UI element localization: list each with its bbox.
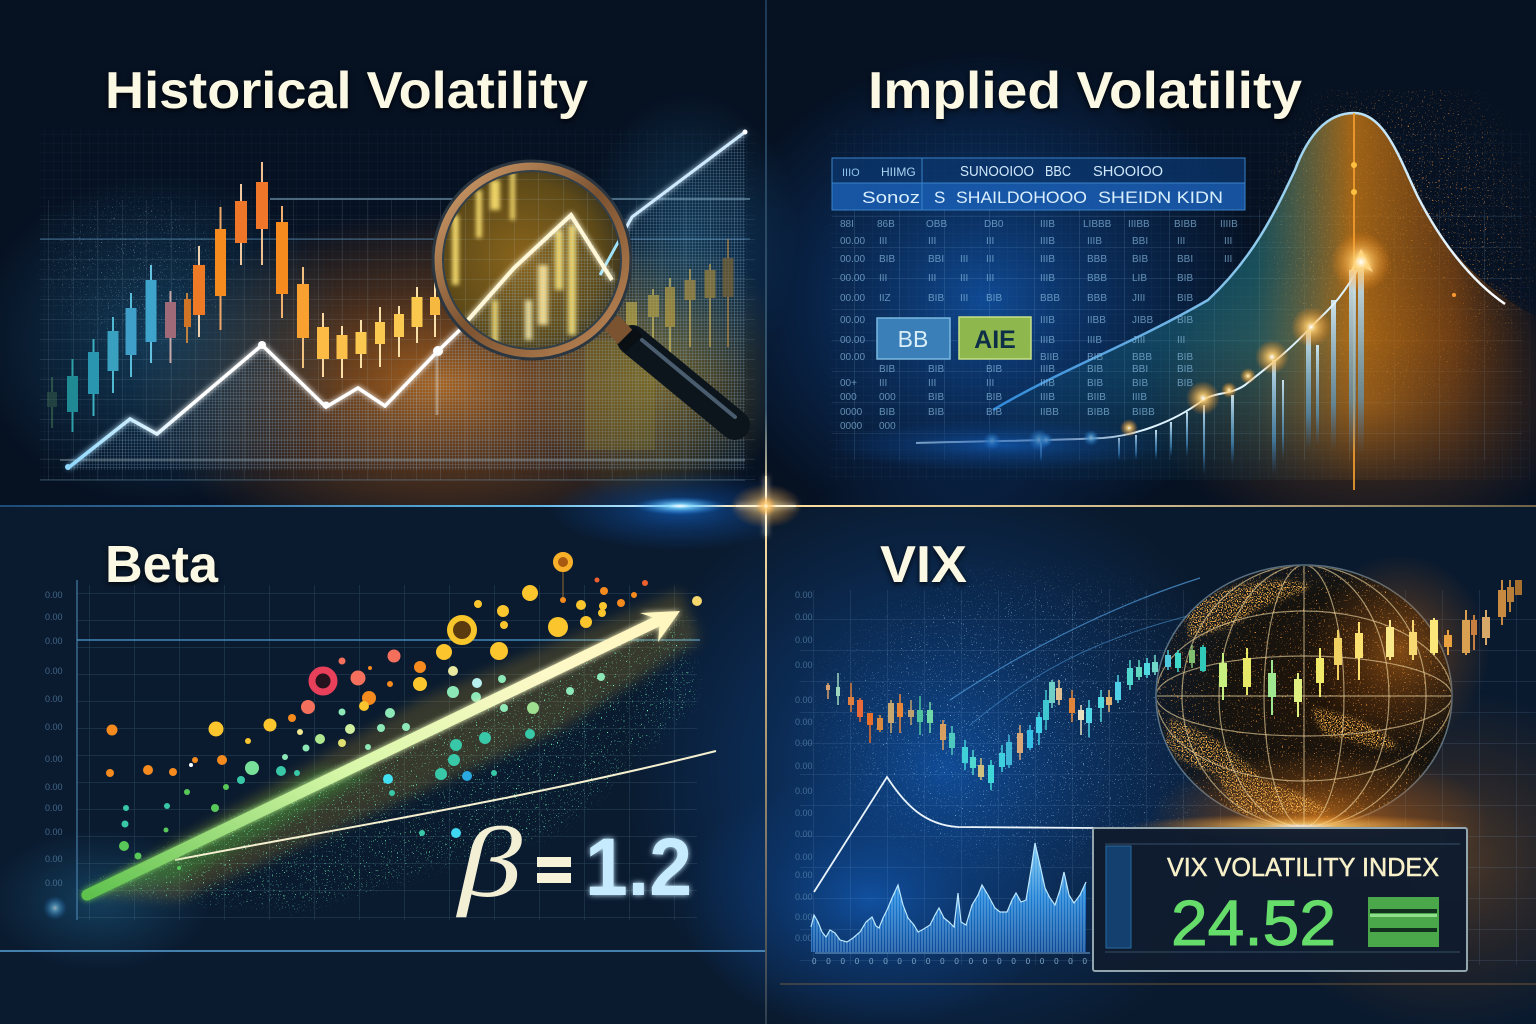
table rows: BBB xyxy=(1087,273,1107,284)
table rows: IIBB xyxy=(1040,407,1059,418)
axis labels: 0.00 xyxy=(795,829,813,839)
table rows: IIZ xyxy=(879,293,891,304)
candlestick chart xyxy=(826,580,1522,790)
table rows: 00.00 xyxy=(840,236,865,247)
table rows: 000 xyxy=(840,392,857,403)
table rows: IIIB xyxy=(1040,335,1055,346)
table rows: LIB xyxy=(1132,273,1147,284)
table rows: 0000 xyxy=(840,421,863,432)
axis labels: 0.00 xyxy=(795,635,813,645)
axis labels: 0.00 xyxy=(45,694,63,704)
table rows: IIIB xyxy=(1040,236,1055,247)
axis labels: 0.00 xyxy=(795,852,813,862)
axis labels: 0.00 xyxy=(795,717,813,727)
panel: historical volatility xyxy=(30,62,755,480)
axis labels: 0.00 xyxy=(45,722,63,732)
options table: SHAILDOHOOO xyxy=(956,188,1087,207)
axis labels: 0.00 xyxy=(795,786,813,796)
table rows: III xyxy=(928,378,936,389)
axis labels: 0.00 xyxy=(795,870,813,880)
options table xyxy=(832,158,1245,432)
table rows: 00.00 xyxy=(840,254,865,265)
chart grid xyxy=(30,130,755,480)
glow under globe xyxy=(1130,814,1470,838)
table rows: BIB xyxy=(879,254,895,265)
table rows: BIB xyxy=(1177,315,1193,326)
chart grid xyxy=(830,90,1536,500)
axis labels: 0.00 xyxy=(45,590,63,600)
table rows: BIB xyxy=(986,293,1002,304)
scatter particles xyxy=(70,554,710,940)
table rows: BIBB xyxy=(1174,219,1197,230)
table rows: BIIB xyxy=(1087,392,1106,403)
table rows: 00.00 xyxy=(840,315,865,326)
area under price line xyxy=(68,132,745,470)
title: implied volatility: Implied Volatility xyxy=(868,62,1302,120)
options table: HIIMG xyxy=(881,165,916,179)
table rows: BIB xyxy=(1132,378,1148,389)
table rows: BBI xyxy=(1132,364,1148,375)
button: green: AIE xyxy=(974,326,1016,354)
scatter plot grid and axis xyxy=(77,580,700,920)
options table: IIIO xyxy=(842,167,860,179)
table rows: IIIB xyxy=(1040,378,1055,389)
table rows: BBB xyxy=(1132,352,1152,363)
table rows: BIB xyxy=(928,392,944,403)
vix readout panel xyxy=(1093,828,1467,971)
table rows: BIIB xyxy=(1040,352,1059,363)
table rows: III xyxy=(1177,335,1185,346)
table rows: 00.00 xyxy=(840,293,865,304)
title: beta: Beta xyxy=(105,536,219,594)
axis labels: 0.00 xyxy=(795,612,813,622)
axis labels: 0.00 xyxy=(795,892,813,902)
table rows: BBB xyxy=(1087,254,1107,265)
table rows: III xyxy=(879,236,887,247)
table rows: III xyxy=(879,273,887,284)
table rows: BIB xyxy=(1177,364,1193,375)
orange light streaks xyxy=(780,935,1536,984)
table rows: IIIB xyxy=(1040,392,1055,403)
table rows: 00+ xyxy=(840,378,857,389)
panel: implied volatility xyxy=(830,62,1536,500)
axis labels: 0.00 xyxy=(795,761,813,771)
table rows: III xyxy=(986,273,994,284)
formula: beta equals 1.2: 1.2 xyxy=(585,822,692,913)
table rows xyxy=(840,219,1238,432)
table rows: BIB xyxy=(986,392,1002,403)
readout status icon xyxy=(1368,897,1439,947)
panel: vix xyxy=(780,536,1536,984)
axis labels: 0.00 xyxy=(795,933,813,943)
axis labels: 0.00 xyxy=(45,666,63,676)
readout label: VIX VOLATILITY INDEX xyxy=(1167,852,1439,882)
axis labels xyxy=(795,590,813,943)
axis labels: 0.00 xyxy=(45,754,63,764)
table rows: LIBBB xyxy=(1083,219,1112,230)
table rows: IIIB xyxy=(1040,273,1055,284)
options table: S xyxy=(934,188,945,207)
table rows: 000 xyxy=(879,421,896,432)
lens: magnified chart xyxy=(444,172,620,348)
table rows: BIB xyxy=(1177,352,1193,363)
table rows: BBI xyxy=(1132,236,1148,247)
table rows: III xyxy=(960,254,968,265)
table rows: JIII xyxy=(1132,335,1145,346)
options table: SUNOOIOO xyxy=(960,163,1034,180)
button: blue xyxy=(877,318,950,359)
axis labels: 0.00 xyxy=(795,808,813,818)
table rows: III xyxy=(960,273,968,284)
table rows: III xyxy=(1224,236,1232,247)
axis labels xyxy=(45,590,63,888)
table rows: 00.00 xyxy=(840,273,865,284)
table rows: IIIB xyxy=(1087,335,1102,346)
options table: BBC xyxy=(1045,163,1071,180)
table rows: BIBB xyxy=(1087,407,1110,418)
rising price curve xyxy=(830,232,1391,475)
candlestick chart xyxy=(47,162,734,450)
axis labels: 0.00 xyxy=(45,878,63,888)
button: green xyxy=(959,317,1031,359)
options table: SHOOIOO xyxy=(1093,163,1163,180)
trend arrow xyxy=(87,611,680,895)
axis labels: 0.00 xyxy=(795,660,813,670)
price line xyxy=(65,130,748,470)
table rows: BIB xyxy=(1177,293,1193,304)
globe landmasses xyxy=(1164,576,1400,818)
table rows: BIB xyxy=(1087,378,1103,389)
table rows: BIB xyxy=(1087,364,1103,375)
table rows: JIII xyxy=(1132,293,1145,304)
axis labels: 0.00 xyxy=(795,695,813,705)
table rows: IIBB xyxy=(1087,315,1106,326)
table rows: III xyxy=(928,273,936,284)
title: vix: VIX xyxy=(880,536,967,594)
table rows: BIB xyxy=(1177,273,1193,284)
axis labels: 0.00 xyxy=(45,827,63,837)
table rows: BIB xyxy=(928,407,944,418)
table rows: 000 xyxy=(879,392,896,403)
table rows: BIB xyxy=(879,407,895,418)
bell-shaped line xyxy=(814,777,1095,892)
table rows: 88I xyxy=(840,219,854,230)
table rows: 86B xyxy=(877,219,895,230)
panel: beta xyxy=(0,536,766,951)
table rows: 00.00 xyxy=(840,335,865,346)
axis labels: 0.00 xyxy=(45,612,63,622)
table rows: DB0 xyxy=(984,219,1004,230)
table rows: IIIBB xyxy=(1128,219,1150,230)
table rows: BIB xyxy=(1132,254,1148,265)
volatility spike chart xyxy=(811,843,1090,966)
table rows: IIIIB xyxy=(1220,219,1238,230)
axis labels: 0.00 xyxy=(45,636,63,646)
table rows: BBB xyxy=(1087,293,1107,304)
table rows: IIIB xyxy=(1040,219,1055,230)
icon: magnifying glass xyxy=(433,161,735,425)
formula: beta equals 1.2 xyxy=(455,807,692,918)
readout value: 24.52 xyxy=(1171,887,1336,959)
table rows: IIIB xyxy=(1087,236,1102,247)
table rows: BBI xyxy=(928,254,944,265)
table rows: BIB xyxy=(1177,378,1193,389)
icon: globe xyxy=(1155,564,1482,838)
options table: Sonoz xyxy=(862,188,920,207)
axis labels: 0.00 xyxy=(45,854,63,864)
table rows: IIIB xyxy=(1040,364,1055,375)
title: historical volatility: Historical Volatility xyxy=(105,62,588,120)
volatility spike chart: 0 0 0 0 0 0 0 0 0 0 0 0 0 0 0 0 0 0 0 0 xyxy=(812,957,1088,966)
table rows: BIB xyxy=(986,364,1002,375)
table rows: IIIB xyxy=(1132,392,1147,403)
formula: beta equals 1.2: β xyxy=(455,807,522,918)
axis labels: 0.00 xyxy=(795,738,813,748)
table rows: IIIB xyxy=(1040,315,1055,326)
axis labels: 0.00 xyxy=(795,590,813,600)
table rows: IIIB xyxy=(1040,254,1055,265)
table rows: III xyxy=(960,293,968,304)
table rows: 00.00 xyxy=(840,352,865,363)
bell curve xyxy=(993,113,1536,490)
axis labels: 0.00 xyxy=(45,803,63,813)
table rows: BBI xyxy=(1177,254,1193,265)
table rows: III xyxy=(986,378,994,389)
button: blue: BB xyxy=(898,326,928,352)
table rows: III xyxy=(879,378,887,389)
table rows: III xyxy=(986,236,994,247)
readout side gauge xyxy=(1106,846,1131,948)
axis labels: 0.00 xyxy=(45,782,63,792)
table rows: BIB xyxy=(928,364,944,375)
table rows: III xyxy=(928,236,936,247)
table rows: BIB xyxy=(928,293,944,304)
table rows: III xyxy=(1177,236,1185,247)
chart grid xyxy=(780,560,1536,980)
table rows: JIBB xyxy=(1132,315,1153,326)
table rows: BIB xyxy=(986,407,1002,418)
table rows: BIBB xyxy=(1132,407,1155,418)
options table: SHEIDN KIDN xyxy=(1098,188,1223,207)
table rows: BIB xyxy=(879,364,895,375)
table rows: OBB xyxy=(926,219,947,230)
regression line xyxy=(175,751,716,860)
table rows: III xyxy=(1224,254,1232,265)
axis labels: 0.00 xyxy=(795,912,813,922)
table rows: III xyxy=(986,254,994,265)
table rows: BIB xyxy=(1087,352,1103,363)
table rows: 0000 xyxy=(840,407,863,418)
table rows: BBB xyxy=(1040,293,1060,304)
